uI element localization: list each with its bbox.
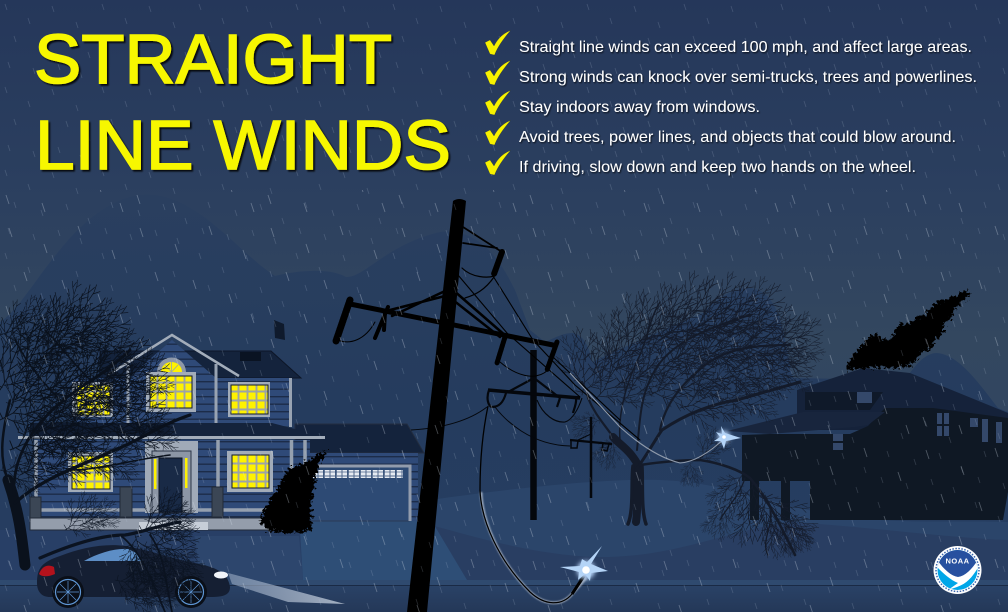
checklist text: Stay indoors away from windows. bbox=[519, 99, 760, 116]
checklist text bbox=[519, 39, 977, 176]
safety checklist bbox=[485, 30, 977, 176]
arched window bbox=[157, 358, 186, 372]
house windows bbox=[833, 392, 1002, 450]
cross arm and hardware bbox=[336, 227, 640, 440]
title: STRAIGHT bbox=[34, 20, 392, 98]
check icons bbox=[485, 30, 510, 175]
car body bbox=[37, 545, 230, 597]
right house silhouette bbox=[727, 368, 1008, 520]
spark on wire bbox=[714, 426, 741, 449]
right upper window bbox=[228, 382, 270, 417]
road bbox=[0, 580, 1008, 612]
wind-blown tree bbox=[543, 258, 830, 569]
right lower window bbox=[227, 451, 273, 492]
pole shaft bbox=[407, 199, 466, 612]
left lower window bbox=[68, 452, 113, 492]
front door bbox=[145, 441, 198, 513]
car windows bbox=[84, 549, 143, 561]
logo wordmark: NOAA bbox=[945, 556, 970, 566]
garage bbox=[295, 424, 424, 521]
wheels bbox=[56, 580, 204, 604]
left upper window bbox=[72, 382, 113, 417]
midground hills bbox=[430, 480, 1008, 612]
spark on ground bbox=[560, 546, 608, 581]
porch roof bbox=[140, 423, 325, 437]
car bbox=[37, 545, 345, 608]
headlight bbox=[214, 572, 228, 578]
title bbox=[34, 20, 451, 184]
title: LINE WINDS bbox=[35, 106, 451, 184]
stone column bases bbox=[30, 487, 223, 518]
porch posts bbox=[36, 440, 305, 516]
lower storey bbox=[35, 440, 310, 518]
NOAA logo bbox=[934, 546, 982, 594]
porch foundation bbox=[30, 518, 292, 530]
checklist text: Avoid trees, power lines, and objects that could blow around. bbox=[519, 129, 956, 146]
checklist text: Strong winds can knock over semi-trucks, trees and powerlines. bbox=[519, 69, 977, 86]
upper roof bbox=[100, 351, 301, 378]
lawn and driveway bbox=[0, 518, 470, 585]
center upper window bbox=[146, 372, 196, 412]
garage door bbox=[300, 466, 410, 521]
left tree bbox=[0, 268, 190, 565]
small pine shrub bbox=[259, 450, 328, 533]
tail light bbox=[39, 566, 55, 576]
tires bbox=[52, 576, 207, 608]
downed wire left bbox=[480, 406, 586, 603]
distant utility poles bbox=[411, 350, 612, 520]
headlight beam bbox=[228, 573, 345, 604]
downed wire right bbox=[570, 373, 725, 463]
checklist text: If driving, slow down and keep two hands on the wheel. bbox=[519, 159, 916, 176]
main house bbox=[18, 335, 325, 530]
main utility pole bbox=[336, 199, 640, 612]
flying roof debris bbox=[274, 320, 285, 340]
distant mountains bbox=[0, 195, 1008, 612]
pine tree on roof bbox=[846, 290, 971, 370]
third pole bbox=[570, 417, 612, 498]
second pole bbox=[411, 350, 582, 520]
checklist text: Straight line winds can exceed 100 mph, and affect large areas. bbox=[519, 39, 972, 56]
fallen tree on car bbox=[40, 479, 214, 612]
gable trim bbox=[108, 335, 239, 376]
upper storey bbox=[73, 378, 290, 426]
